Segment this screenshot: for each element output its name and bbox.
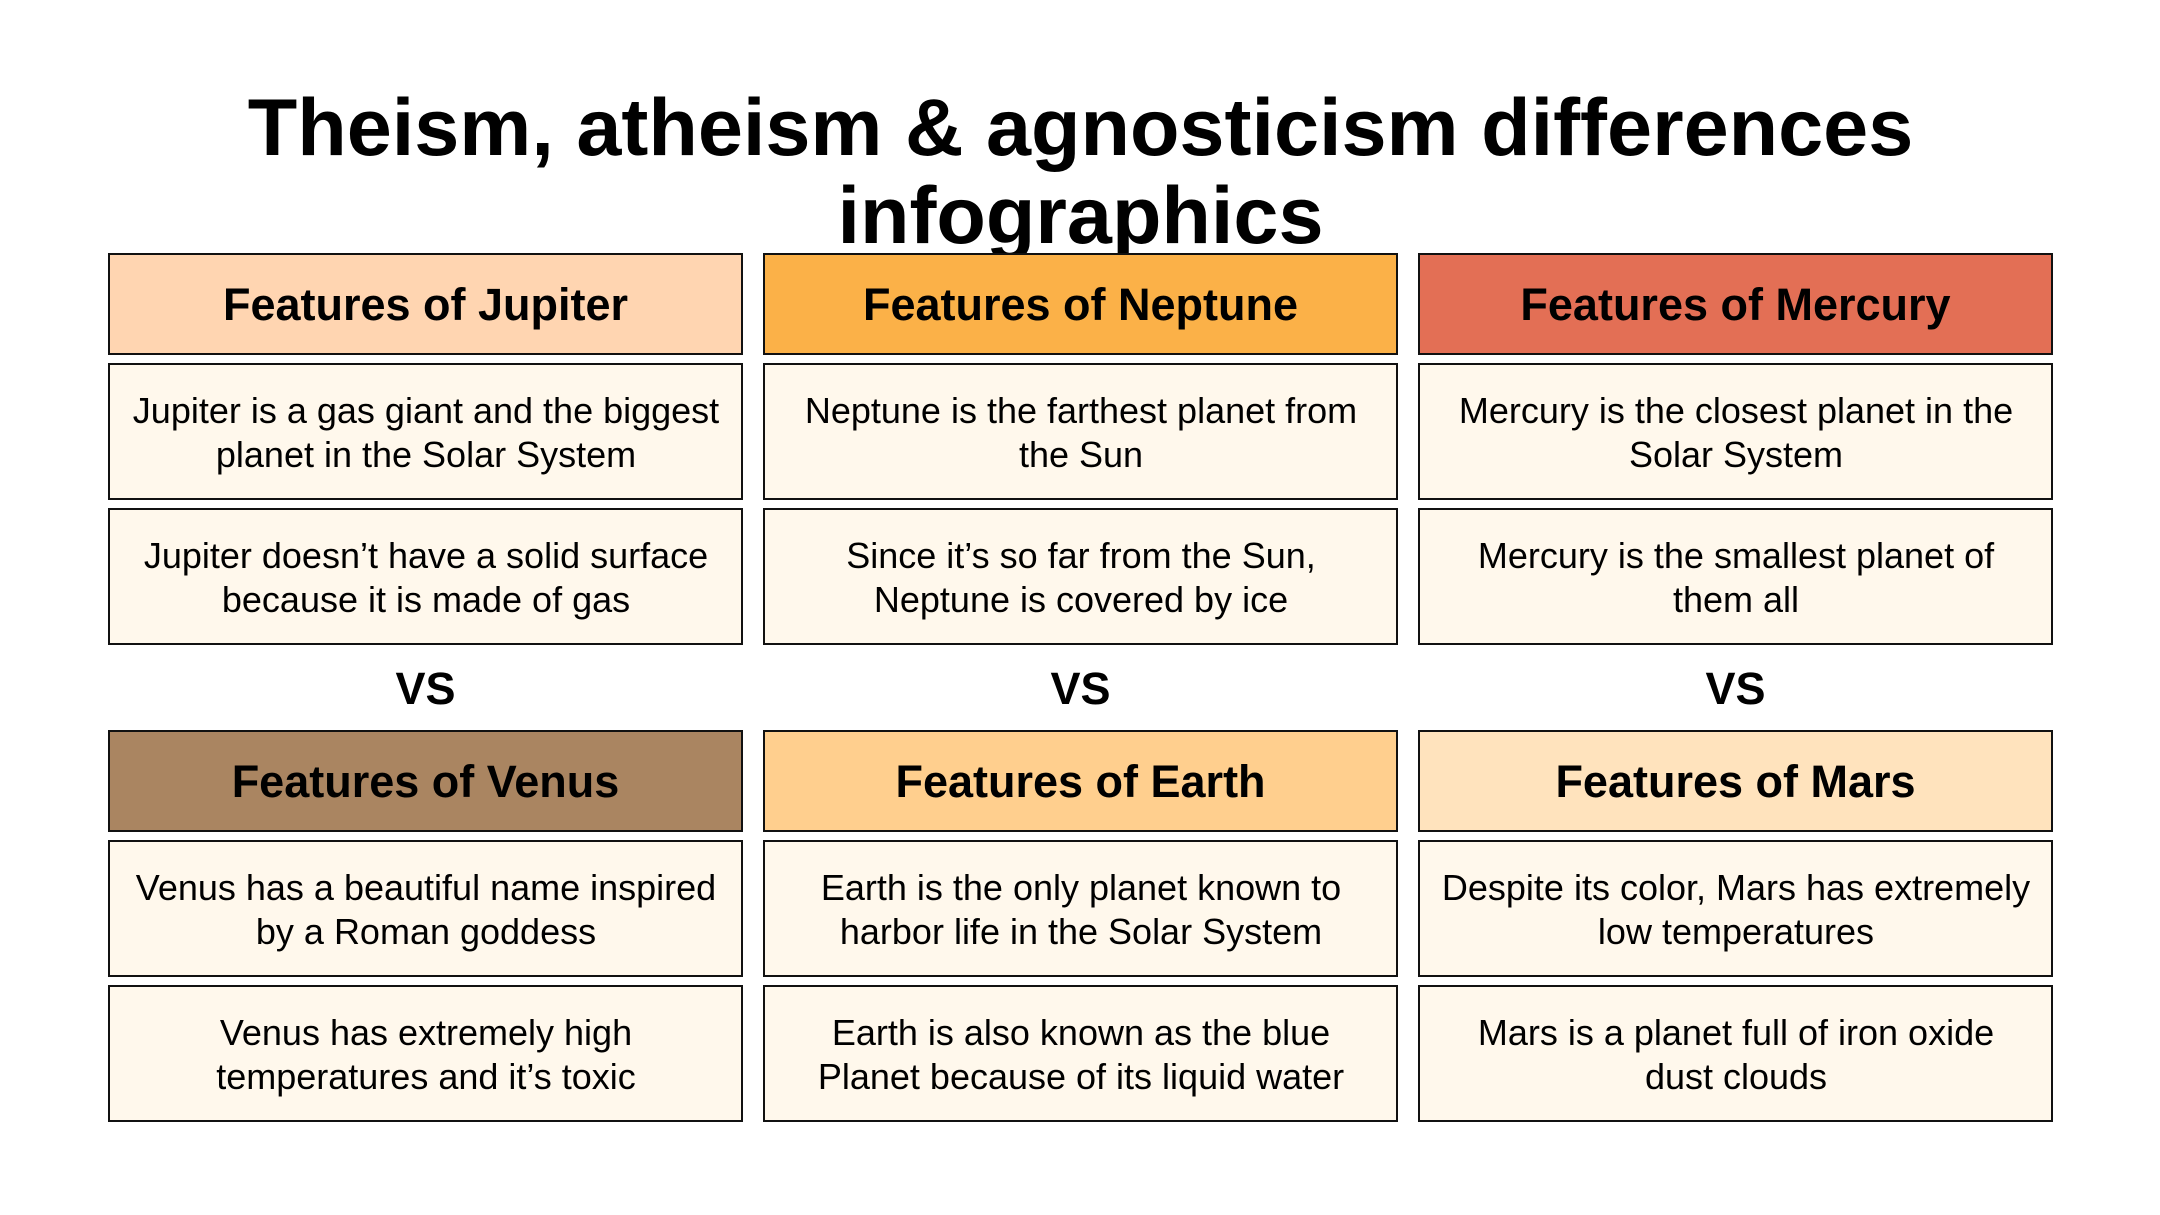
text box: Mars fact 2: dust clouds — [1645, 1056, 1827, 1096]
header: Features of Mars: Features of Mars — [1555, 756, 1916, 807]
text box: Earth fact 2: Earth is also known as the blue — [832, 1012, 1330, 1053]
title — [248, 83, 1913, 261]
text box: Mercury fact 2 — [1418, 508, 2053, 645]
text box: Mercury fact 2: them all — [1673, 578, 1799, 620]
text box: Jupiter fact 2: Jupiter doesn’t have a solid surface — [144, 535, 708, 576]
header: Features of Neptune — [763, 253, 1398, 355]
text box: Mercury fact 1: Solar System — [1629, 434, 1843, 474]
VS label: column 1: VS — [395, 663, 456, 714]
text box: Jupiter fact 1: Jupiter is a gas giant and the biggest — [133, 390, 719, 431]
text box: Earth fact 1 — [763, 840, 1398, 977]
text box: Mars fact 1: low temperatures — [1598, 910, 1874, 952]
header: Features of Venus: Features of Venus — [232, 756, 619, 807]
text box: Jupiter fact 2 — [108, 508, 743, 645]
text box: Earth fact 2 — [763, 985, 1398, 1122]
header: Features of Jupiter — [108, 253, 743, 355]
text box: Neptune fact 1: Neptune is the farthest planet from — [805, 390, 1357, 431]
text box: Neptune fact 2: Since it’s so far from the Sun, — [846, 535, 1316, 576]
text box: Earth fact 1: harbor life in the Solar System — [840, 910, 1322, 952]
header: Features of Mars — [1418, 730, 2053, 832]
text box: Mercury fact 1 — [1418, 363, 2053, 500]
VS label: column 3: VS — [1705, 663, 1766, 714]
text box: Mercury fact 1: Mercury is the closest planet in the — [1459, 390, 2013, 431]
header: Features of Neptune: Features of Neptune — [863, 279, 1298, 330]
text box: Venus fact 1 — [108, 840, 743, 977]
text box: Venus fact 2 — [108, 985, 743, 1122]
text box: Mercury fact 2: Mercury is the smallest planet of — [1478, 535, 1994, 576]
text box: Neptune fact 2 — [763, 508, 1398, 645]
text box: Mars fact 2 — [1418, 985, 2053, 1122]
header: Features of Earth — [763, 730, 1398, 832]
text box: Neptune fact 2: Neptune is covered by ice — [874, 578, 1288, 620]
text box: Jupiter fact 2: because it is made of gas — [222, 578, 630, 620]
text box: Neptune fact 1: the Sun — [1019, 434, 1143, 474]
header: Features of Jupiter: Features of Jupiter — [223, 279, 628, 330]
text box: Mars fact 2: Mars is a planet full of iron oxide — [1478, 1012, 1994, 1053]
text box: Jupiter fact 1: planet in the Solar System — [216, 434, 636, 474]
header: Features of Earth: Features of Earth — [895, 756, 1266, 807]
text box: Venus fact 2: Venus has extremely high — [220, 1012, 632, 1053]
VS label: column 2: VS — [1050, 663, 1111, 714]
header: Features of Venus — [108, 730, 743, 832]
title: Theism, atheism & agnosticism differences — [248, 83, 1913, 173]
text box: Earth fact 2: Planet because of its liquid water — [818, 1056, 1344, 1096]
text box: Mars fact 1: Despite its color, Mars has extremely — [1442, 867, 2030, 908]
header: Features of Mercury — [1418, 253, 2053, 355]
header: Features of Mercury: Features of Mercury — [1520, 279, 1951, 330]
text box: Earth fact 1: Earth is the only planet known to — [821, 867, 1341, 908]
text box: Neptune fact 1 — [763, 363, 1398, 500]
text box: Venus fact 2: temperatures and it’s toxic — [216, 1056, 636, 1096]
text box: Jupiter fact 1 — [108, 363, 743, 500]
text box: Mars fact 1 — [1418, 840, 2053, 977]
text box: Venus fact 1: Venus has a beautiful name inspired — [136, 867, 716, 908]
title: infographics — [837, 171, 1324, 261]
text box: Venus fact 1: by a Roman goddess — [256, 910, 596, 952]
